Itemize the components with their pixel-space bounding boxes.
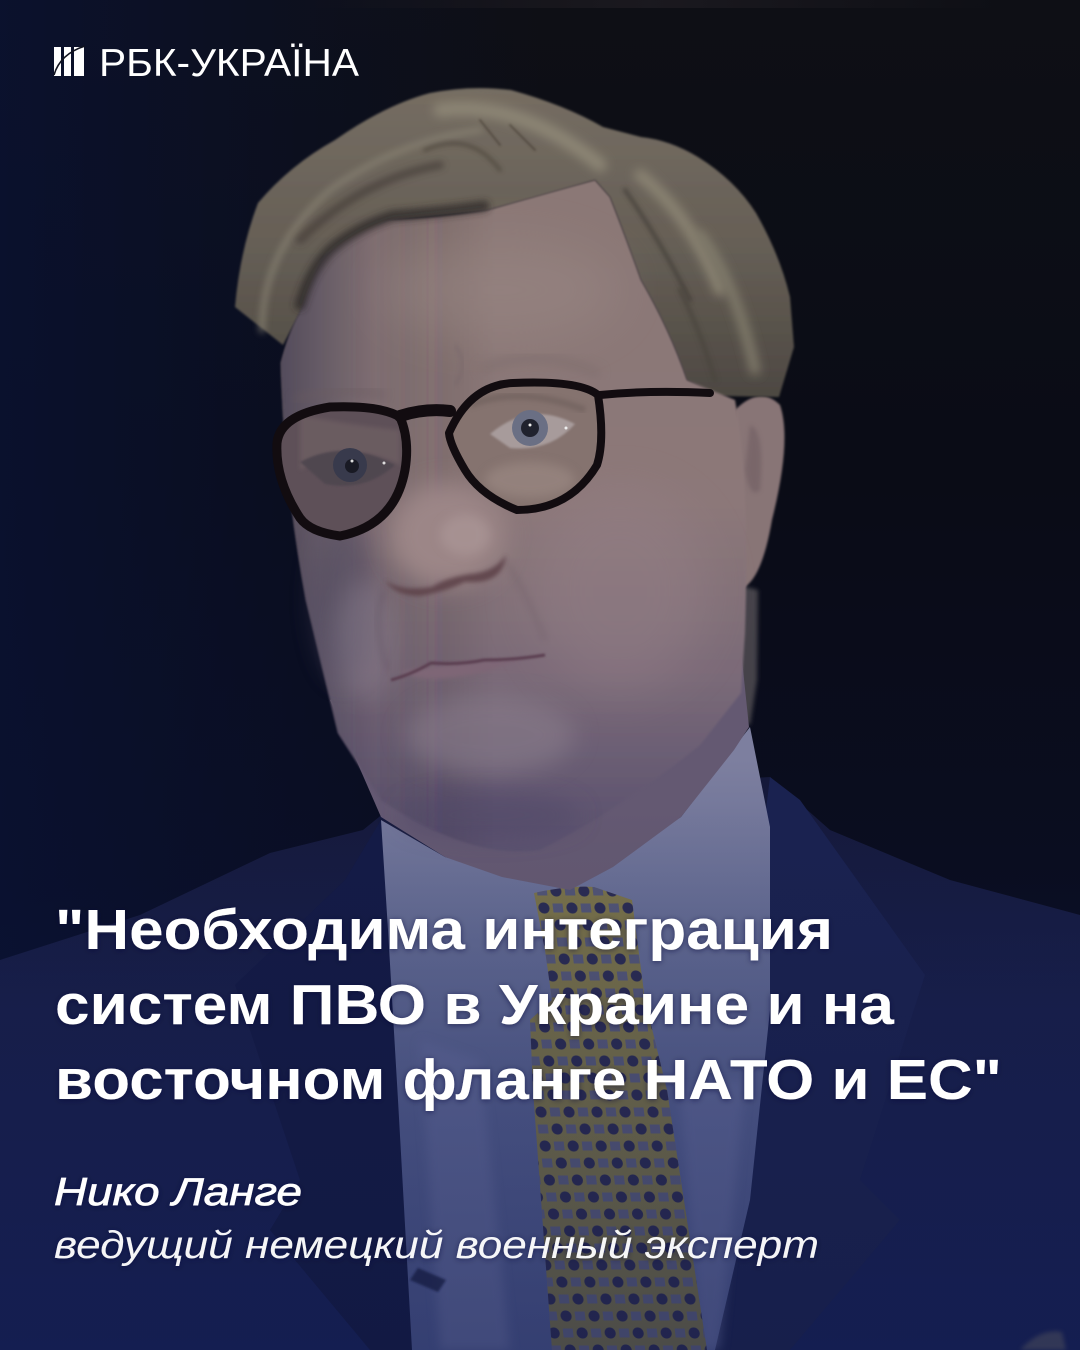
nose (385, 483, 506, 596)
mouth (391, 655, 545, 680)
logo: РБК-Україна (54, 42, 359, 85)
speaker role: ведущий немецкий военный эксперт (54, 1224, 819, 1267)
facial shading (295, 240, 710, 837)
hair at the back of the jaw (738, 585, 758, 725)
tie (530, 887, 707, 1350)
lapel microphone (410, 1268, 446, 1292)
logo wordmark: РБК-УКРАЇНА (99, 42, 359, 85)
hair (235, 88, 794, 397)
shirt folds (420, 1040, 745, 1350)
glasses (277, 382, 710, 536)
icon: logo mark (54, 46, 85, 76)
speaker name: Нико Ланге (54, 1171, 302, 1214)
neck and chin (330, 620, 749, 890)
quote headline: восточном фланге НАТО и ЕС" (55, 1048, 1002, 1112)
right lens and eye (470, 386, 597, 506)
shirt (381, 727, 770, 1350)
left lens and eye (281, 411, 402, 532)
face (281, 180, 746, 851)
quote headline (55, 898, 1002, 1112)
suit jacket (0, 777, 1080, 1350)
attribution (54, 1171, 819, 1267)
quote headline: систем ПВО в Украине и на (55, 973, 895, 1037)
quote headline: "Необходима интеграция (55, 898, 833, 962)
lower body shade (0, 800, 1080, 1350)
ear (735, 396, 784, 590)
hair highlights and hairline (262, 109, 755, 380)
